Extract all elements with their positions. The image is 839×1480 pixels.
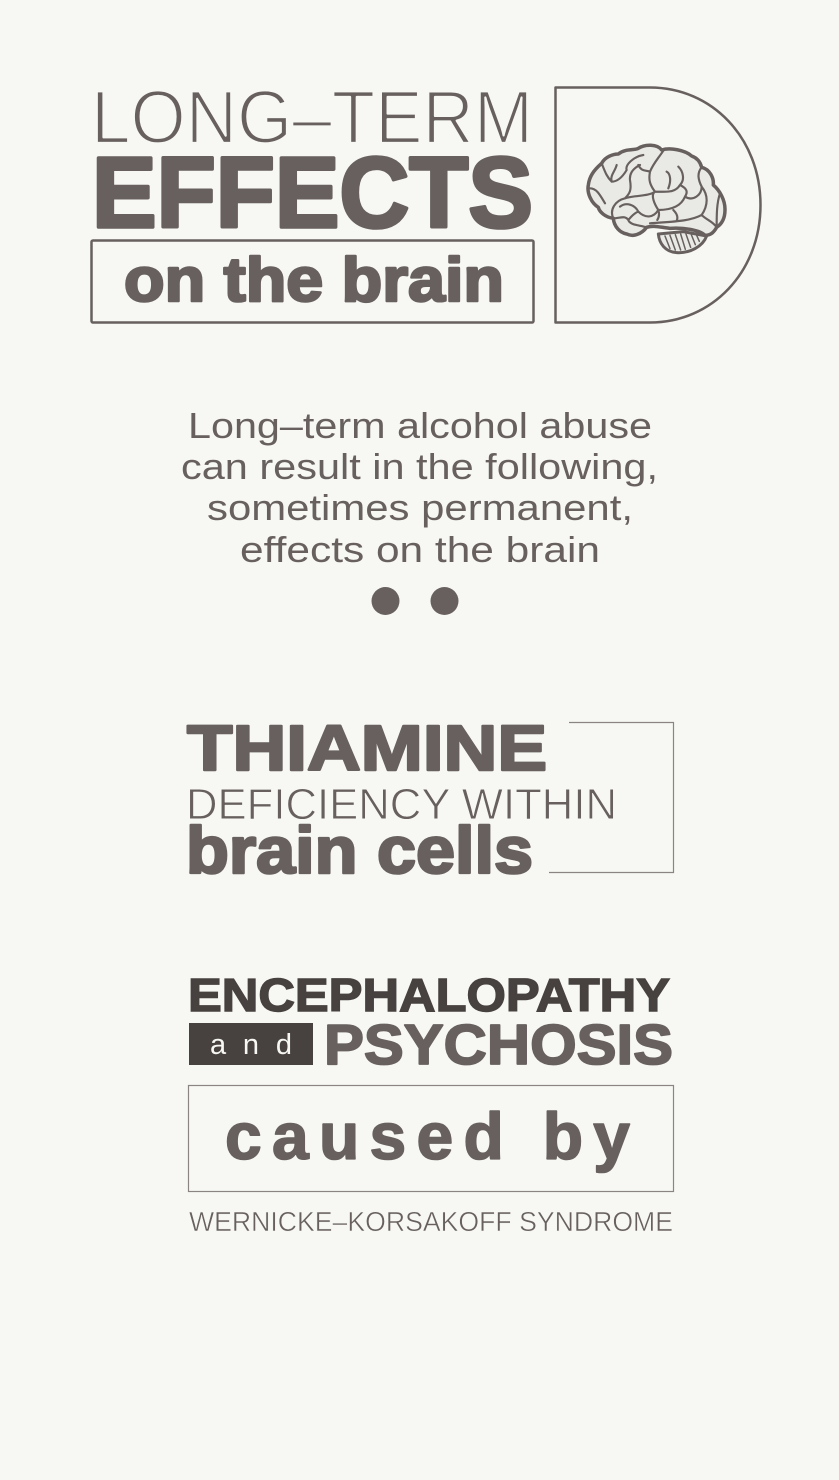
title: effects: EFFECTS [92,137,533,249]
box: caused by: caused by [225,1099,630,1173]
bracket frame [549,722,674,872]
heading: psychosis: PSYCHOSIS [324,1013,673,1077]
label box: and [189,1023,313,1065]
panel: encephalopathy and psychosis [188,969,674,1237]
intro paragraph: Long–term alcohol abuse [188,405,652,446]
intro paragraph: sometimes permanent, [207,487,633,528]
intro paragraph: effects on the brain [240,529,600,570]
heading: encephalopathy: ENCEPHALOPATHY [188,969,670,1021]
outlined letter D [556,88,760,322]
heading: thiamine: THIAMINE [187,712,547,784]
icon: brain [588,145,725,253]
title: long-term: LONG–TERM [91,75,533,159]
box: caused by [188,1086,674,1192]
intro paragraph: can result in the following, [181,446,658,487]
subtitle box: on the brain: on the brain [124,246,504,315]
text: wernicke-korsakoff syndrome: WERNICKE–KORSAKOFF SYNDROME [189,1206,673,1237]
title block [91,75,760,322]
heading: brain cells: brain cells [186,813,533,887]
panel: thiamine deficiency [186,712,674,887]
two dots divider [372,587,458,615]
text: deficiency within: DEFICIENCY WITHIN [186,780,617,829]
label box: and: and [210,1029,292,1061]
subtitle box: on the brain [92,240,534,322]
intro paragraph [181,405,658,570]
